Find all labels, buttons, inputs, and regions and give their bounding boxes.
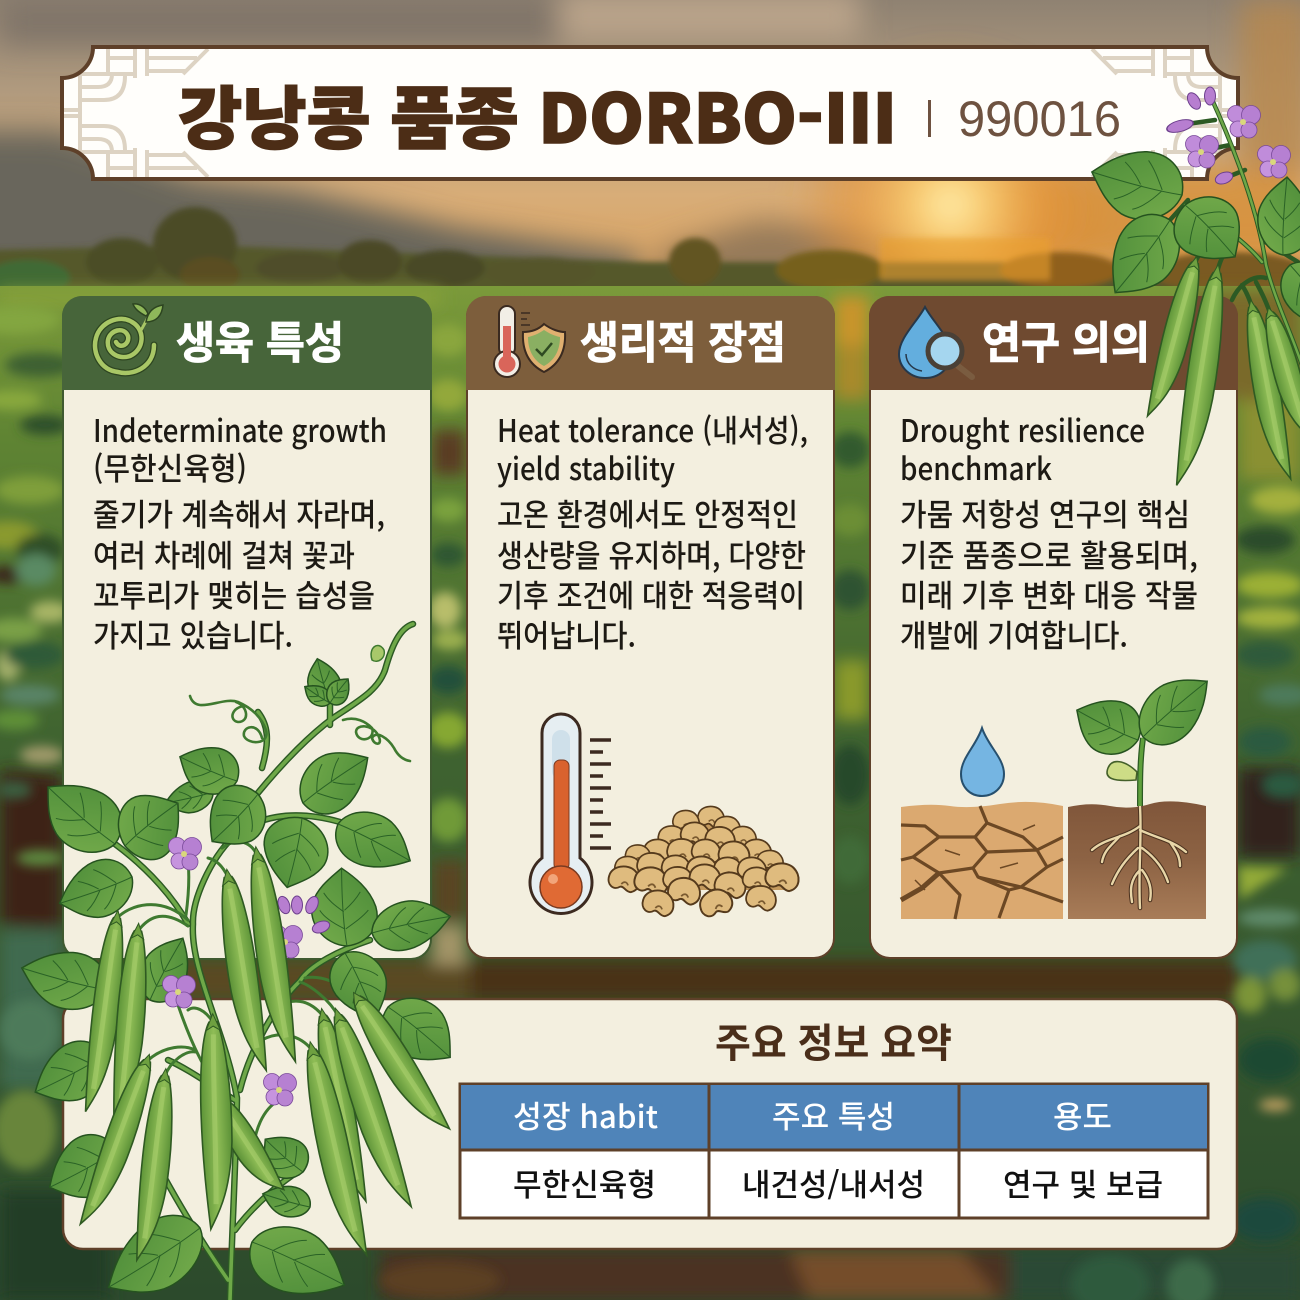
- title: main heading: 강낭콩 품종 DORBO-III: [178, 64, 897, 163]
- text block: growth: (무한신육형): [93, 444, 247, 489]
- text block: physiology: 생산량을 유지하며, 다양한: [497, 531, 806, 576]
- text block: research: 개발에 기여합니다.: [900, 611, 1128, 656]
- strip: left foliage: [0, 306, 60, 334]
- icon: sprout spiral: [95, 304, 163, 373]
- strip: left lower foliage: [0, 1090, 57, 1170]
- panel header: research: [869, 296, 1238, 390]
- table data row: 내건성/내서성: [742, 1160, 925, 1205]
- text block: physiology: 기후 조건에 대한 적응력이: [497, 571, 805, 616]
- illustration: water drop: [961, 728, 1004, 796]
- table header row: 용도: [1053, 1092, 1112, 1137]
- table data row: [513, 1160, 1163, 1205]
- text block: growth: 줄기가 계속해서 자라며,: [93, 490, 385, 535]
- text block: physiology: 뛰어납니다.: [497, 611, 636, 656]
- heading: physiology: 생리적 장점: [580, 307, 786, 371]
- plant stem: [1170, 95, 1300, 365]
- table header row: 성장 habit: [513, 1092, 658, 1137]
- plant flowers: [1166, 87, 1290, 186]
- plant pods: [1143, 254, 1300, 489]
- panel header: physiology: [466, 296, 835, 390]
- illustration: cracked soil: [901, 802, 1063, 919]
- panel: title plaque: [62, 47, 1238, 179]
- text block: growth: 가지고 있습니다.: [93, 611, 293, 656]
- table data row: 무한신육형: [513, 1160, 656, 1205]
- illustration: bean pile: [609, 806, 799, 923]
- illustration: left bean plant: [15, 624, 469, 1300]
- icon: water drop with magnifier: [899, 307, 972, 378]
- text block: physiology: yield stability: [497, 444, 675, 489]
- table header row: 주요 특성: [772, 1092, 895, 1137]
- panel header: growth: [62, 296, 432, 390]
- text block: physiology: Heat tolerance (내서성),: [497, 406, 808, 451]
- plant stems and tendrils: [115, 624, 413, 1300]
- text block: research: 가뭄 저항성 연구의 핵심: [900, 490, 1190, 535]
- heading: growth: 생육 특성: [176, 307, 344, 371]
- plant flowers: [162, 838, 331, 1106]
- panel: physiological advantages: [466, 296, 835, 958]
- text block: growth: 여러 차례에 걸쳐 꽃과: [93, 531, 355, 576]
- strip: gap one foliage: [428, 324, 468, 356]
- text block: research: 미래 기후 변화 대응 작물: [900, 571, 1198, 616]
- panel: growth characteristics: [62, 296, 432, 959]
- text block: growth: [93, 406, 387, 656]
- heading: summary: 주요 정보 요약: [715, 1011, 952, 1069]
- table: key info: [460, 1084, 1208, 1218]
- illustration: seedling with roots: [1065, 661, 1225, 919]
- text block: research: Drought resilience: [900, 406, 1145, 451]
- strip: gap two foliage: [830, 432, 870, 468]
- panel: research significance: [869, 296, 1238, 958]
- text block: growth: 꼬투리가 맺히는 습성을: [93, 571, 375, 616]
- text block: growth: Indeterminate growth: [93, 406, 387, 451]
- panel: summary: [63, 999, 1237, 1249]
- text block: research: benchmark: [900, 444, 1052, 489]
- text block: research: 기준 품종으로 활용되며,: [900, 531, 1198, 576]
- icon: thermometer and shield: [494, 306, 565, 377]
- plant leaves: [15, 654, 469, 1300]
- illustration: thermometer: [530, 714, 611, 913]
- illustration: top-right bean plant: [1083, 87, 1300, 489]
- text block: physiology: [497, 406, 808, 656]
- table data row: 연구 및 보급: [1003, 1160, 1163, 1205]
- strip: right foliage: [1250, 486, 1300, 514]
- title ornament: corner lattice: [62, 48, 1238, 178]
- text block: research: [900, 406, 1198, 656]
- title: code number: 990016: [958, 91, 1121, 147]
- text block: physiology: 고온 환경에서도 안정적인: [497, 490, 798, 535]
- plant pods: [75, 845, 454, 1262]
- plant leaves: [1083, 139, 1300, 346]
- table header row: [513, 1092, 1112, 1137]
- heading: research: 연구 의의: [982, 307, 1150, 371]
